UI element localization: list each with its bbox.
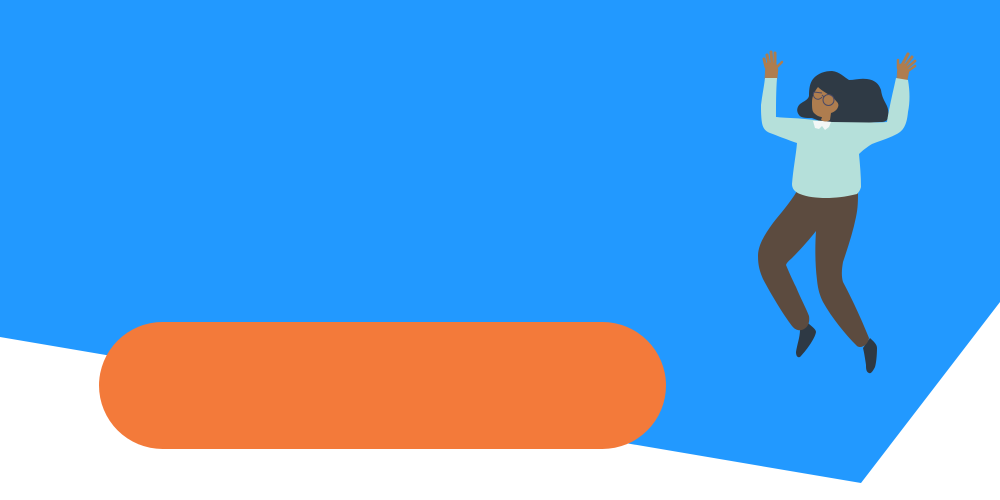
left hand: [764, 52, 782, 79]
hair: [797, 71, 888, 125]
right shoe: [863, 338, 877, 373]
orange pill: [99, 322, 666, 449]
neck and face: [812, 87, 838, 122]
sweater: [761, 78, 910, 198]
trousers: [758, 191, 869, 347]
icon: jumping woman: [758, 52, 915, 373]
left shoe: [796, 323, 816, 357]
collar: [813, 121, 831, 130]
glasses: [813, 92, 834, 106]
right hand: [897, 54, 915, 81]
